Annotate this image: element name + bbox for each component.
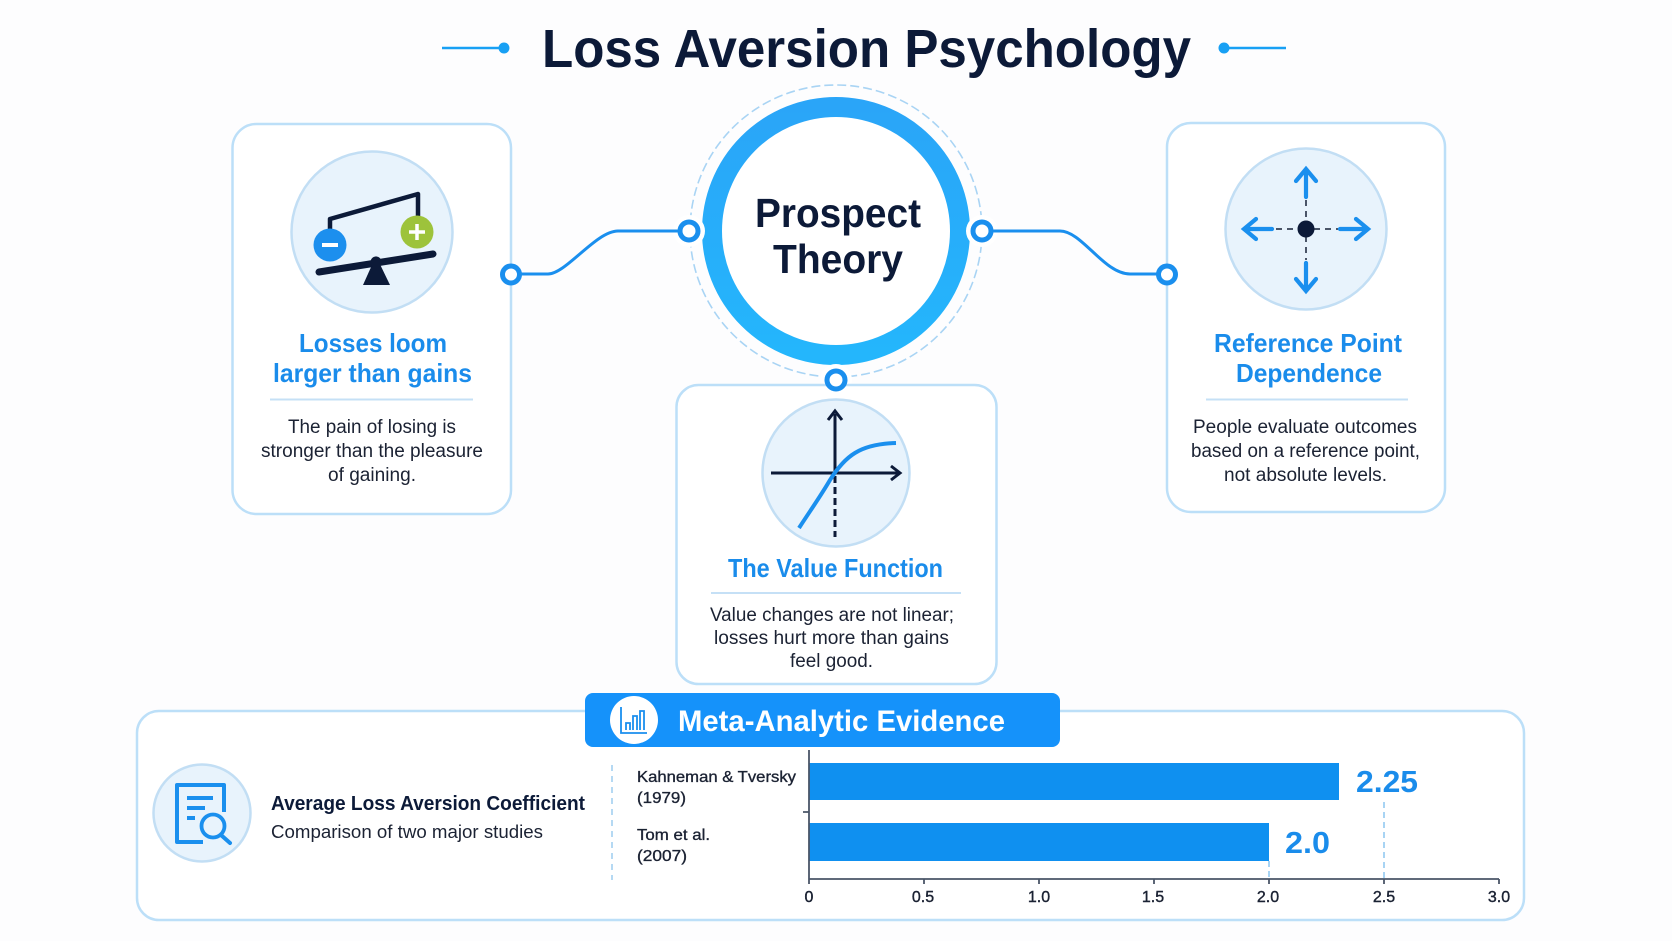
central hub: Prospect Theory <box>673 85 998 396</box>
category labels: Tom et al. <box>637 827 710 844</box>
description: People evaluate outcomes <box>1193 417 1417 438</box>
icon: value function graph <box>762 400 910 546</box>
bar: Tom et al. <box>809 823 1269 861</box>
central hub: Prospect Theory: Theory <box>773 236 903 282</box>
panel: reference point dependence <box>1167 123 1445 512</box>
heading line 2: Dependence <box>1236 358 1382 388</box>
panel: the value function <box>676 385 996 684</box>
description <box>261 417 483 486</box>
description: feel good. <box>790 651 873 672</box>
description: stronger than the pleasure <box>261 441 483 462</box>
category labels: (1979) <box>637 790 686 807</box>
connector: left card to center <box>511 231 689 274</box>
bar: Kahneman & Tversky <box>809 763 1339 800</box>
label: coefficient heading: Average Loss Aversion Coefficient <box>271 793 585 815</box>
label: subtitle: Comparison of two major studies <box>271 822 543 842</box>
icon: balance scale <box>292 152 452 312</box>
central hub: Prospect Theory: Prospect <box>755 190 921 236</box>
category labels <box>637 769 796 865</box>
heading: Reference Point <box>1214 328 1402 358</box>
axis tick labels: 2.0 <box>1257 889 1279 906</box>
heading: Losses loom <box>299 328 447 358</box>
bar chart <box>637 750 1510 906</box>
description: Value changes are not linear; <box>710 605 954 626</box>
value: 2.0: 2.0 <box>1285 825 1330 860</box>
axis tick labels: 0.5 <box>912 889 934 906</box>
description: based on a reference point, <box>1191 441 1420 462</box>
value: 2.25: 2.25 <box>1356 764 1418 799</box>
axis tick labels: 0 <box>805 889 814 906</box>
axis tick labels <box>805 889 1510 906</box>
banner: Meta-Analytic Evidence <box>678 705 1005 738</box>
connector nodes <box>502 222 1176 389</box>
banner <box>585 693 1060 747</box>
description: The pain of losing is <box>288 417 456 438</box>
category labels: (2007) <box>637 848 687 865</box>
icon: document with magnifier <box>154 764 250 862</box>
axis tick labels: 1.0 <box>1028 889 1050 906</box>
icon: reference point arrows <box>1226 148 1386 310</box>
description: of gaining. <box>328 465 416 486</box>
description: losses hurt more than gains <box>714 628 949 649</box>
axis tick labels: 2.5 <box>1373 889 1395 906</box>
description <box>710 605 954 672</box>
description <box>1191 417 1420 486</box>
title: Loss Aversion Psychology <box>542 19 1191 79</box>
heading line 2: larger than gains <box>273 358 472 388</box>
axis tick labels: 3.0 <box>1488 889 1510 906</box>
axis tick labels: 1.5 <box>1142 889 1164 906</box>
connector: center to right card <box>982 231 1167 274</box>
category labels: Kahneman & Tversky <box>637 769 796 786</box>
description: not absolute levels. <box>1224 465 1387 486</box>
panel: losses loom larger than gains <box>232 124 511 514</box>
heading: The Value Function <box>728 553 943 583</box>
panel: meta-analytic evidence <box>137 693 1524 920</box>
